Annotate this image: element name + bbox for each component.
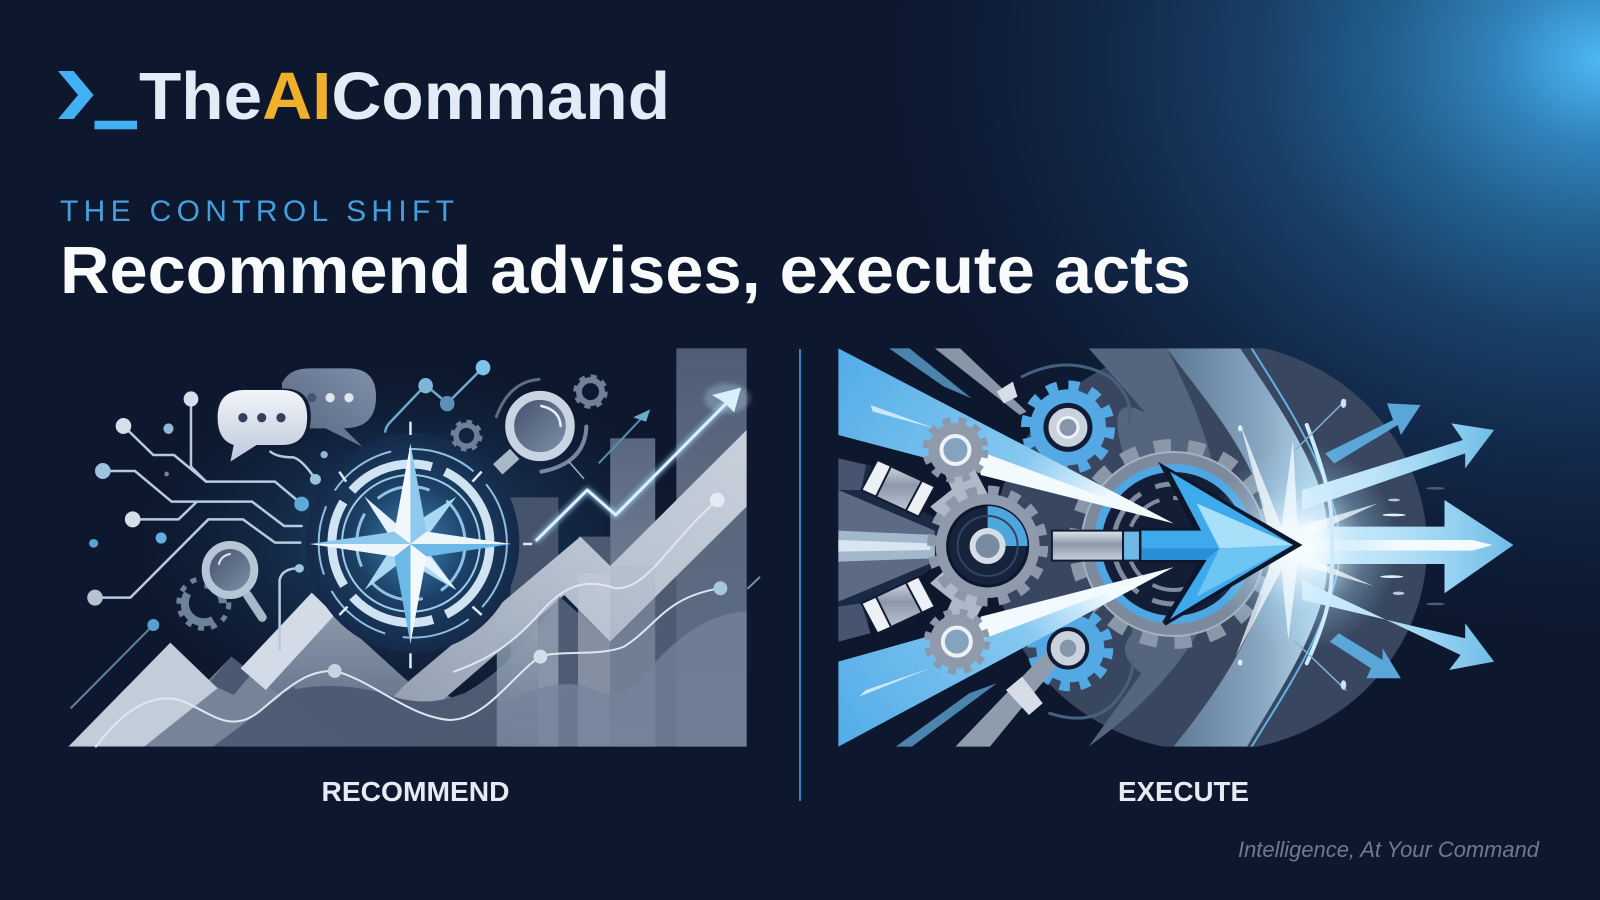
converging rays — [838, 348, 1174, 747]
tagline: Intelligence, At Your Command — [1238, 837, 1540, 862]
panel: execute illustration — [838, 342, 1513, 752]
eyebrow: THE CONTROL SHIFT — [60, 195, 454, 228]
thin diagonal line — [71, 619, 159, 708]
piston shaft — [1052, 531, 1210, 561]
label: recommend: RECOMMEND — [322, 776, 510, 807]
small trend line — [385, 360, 490, 432]
title: Recommend advises, execute acts — [60, 233, 1191, 308]
circuit lines — [95, 399, 315, 650]
pistons — [838, 458, 935, 642]
arms — [930, 463, 991, 627]
bar chart backdrop — [511, 348, 747, 747]
icon: terminal prompt — [58, 71, 137, 129]
logo wordmark: TheAICommand — [139, 59, 670, 134]
hub gear assembly — [838, 420, 1044, 672]
main arrow — [1141, 468, 1298, 623]
small gears — [925, 420, 985, 480]
icon: speech bubbles — [214, 368, 376, 464]
compass — [306, 422, 532, 668]
thin blue arrow — [599, 409, 650, 463]
circuit nodes — [87, 391, 328, 606]
icon: large magnifier — [496, 379, 586, 478]
impact burst — [1206, 423, 1399, 663]
grey disc backdrop — [994, 342, 1427, 752]
label: execute: EXECUTE — [1118, 776, 1249, 807]
icon: lower blue gear — [1032, 610, 1108, 686]
icon: small magnifier with gear — [179, 545, 262, 628]
data curve nodes — [328, 493, 727, 678]
dark band behind rays — [838, 458, 939, 642]
icon: small gear — [452, 422, 480, 450]
arc details — [1022, 365, 1132, 718]
glowing growth arrow — [537, 383, 750, 540]
mountain chart shapes — [68, 430, 747, 747]
panel: recommend illustration — [68, 348, 759, 747]
logo — [58, 59, 670, 134]
large gear — [1076, 446, 1272, 642]
background glow — [128, 363, 697, 723]
divider — [799, 349, 801, 801]
center hub — [932, 490, 1044, 602]
incoming arrows and rods — [889, 348, 1087, 747]
icon: upper gear — [575, 377, 605, 407]
data curves — [96, 500, 759, 747]
outgoing arrows — [1302, 403, 1513, 678]
needles and sparks — [1238, 399, 1445, 690]
icon: upper blue gear — [1026, 385, 1110, 469]
